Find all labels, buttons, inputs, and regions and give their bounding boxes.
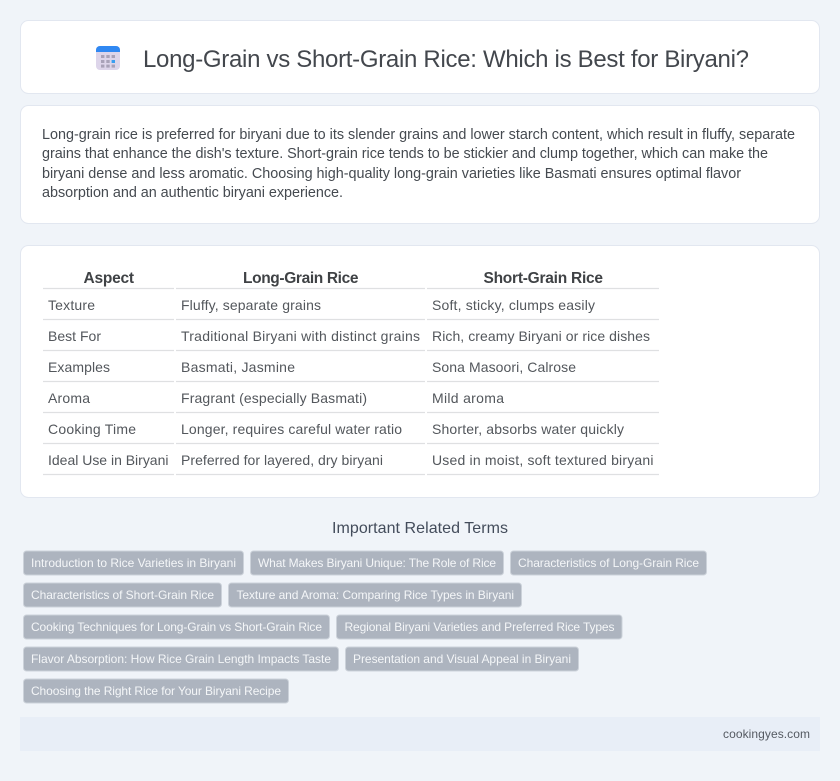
related terms tags xyxy=(24,551,706,703)
footer source text: cookingyes.com xyxy=(723,727,810,741)
row: ideal use: Used in moist, soft textured biryani xyxy=(432,452,654,468)
intro paragraph: absorption and an authentic biryani experience. xyxy=(42,185,343,201)
row: cooking time: Cooking Time xyxy=(48,421,136,437)
row: examples: Basmati, Jasmine xyxy=(181,359,295,375)
table header: Long-Grain Rice xyxy=(243,270,359,287)
row: best for xyxy=(48,328,650,344)
tag: Choosing the Right Rice for Your Biryani Recipe xyxy=(31,684,281,698)
intro paragraph: Long-grain rice is preferred for biryani due to its slender grains and lower starch content, which result in fluffy, separate xyxy=(42,127,795,143)
row: best for: Best For xyxy=(48,328,101,344)
tag: Flavor Absorption: How Rice Grain Length Impacts Taste xyxy=(31,652,331,666)
icon: calendar xyxy=(96,46,120,70)
row: examples: Examples xyxy=(48,359,110,375)
tag xyxy=(24,583,222,607)
row: ideal use: Ideal Use in Biryani xyxy=(48,452,168,468)
table header: Short-Grain Rice xyxy=(484,270,603,287)
header panel xyxy=(20,20,820,94)
tag: Cooking Techniques for Long-Grain vs Short-Grain Rice xyxy=(31,620,322,634)
heading: related terms: Important Related Terms xyxy=(332,520,508,537)
tag: Characteristics of Short-Grain Rice xyxy=(31,588,214,602)
table header xyxy=(84,270,603,287)
intro paragraph: biryani dense and less aromatic. Choosing high-quality long-grain varieties like Basmati ensures optimal flavor xyxy=(42,166,741,182)
row: aroma xyxy=(48,390,504,406)
row: aroma: Fragrant (especially Basmati) xyxy=(181,390,367,406)
row: texture: Texture xyxy=(48,297,95,313)
row: best for: Traditional Biryani with distinct grains xyxy=(181,328,420,344)
tag: Characteristics of Long-Grain Rice xyxy=(518,556,699,570)
tag xyxy=(336,615,622,639)
tag xyxy=(228,583,522,607)
tag xyxy=(24,647,338,671)
intro paragraph: grains that enhance the dish's texture. Short-grain rice tends to be stickier and clump together, which can make the xyxy=(42,146,768,162)
tag xyxy=(24,679,288,703)
row: texture xyxy=(48,297,595,313)
tag: Texture and Aroma: Comparing Rice Types in Biryani xyxy=(236,588,514,602)
intro paragraph xyxy=(42,127,795,201)
tag xyxy=(24,551,244,575)
tag xyxy=(250,551,504,575)
tag: Regional Biryani Varieties and Preferred Rice Types xyxy=(344,620,614,634)
row: cooking time xyxy=(48,421,624,437)
row: examples xyxy=(48,359,576,375)
title: Long-Grain vs Short-Grain Rice: Which is Best for Biryani? xyxy=(143,46,749,73)
tag xyxy=(24,615,330,639)
row: texture: Fluffy, separate grains xyxy=(181,297,321,313)
row: cooking time: Shorter, absorbs water quickly xyxy=(432,421,624,437)
panel: comparison table xyxy=(20,246,820,498)
row: best for: Rich, creamy Biryani or rice dishes xyxy=(432,328,650,344)
row: aroma: Mild aroma xyxy=(432,390,504,406)
tag xyxy=(510,551,706,575)
row: cooking time: Longer, requires careful water ratio xyxy=(181,421,402,437)
panel: introduction xyxy=(20,106,820,224)
table header: Aspect xyxy=(84,270,134,287)
row: ideal use xyxy=(48,452,654,468)
footer xyxy=(20,717,820,751)
tag xyxy=(346,647,578,671)
row: aroma: Aroma xyxy=(48,390,90,406)
row: examples: Sona Masoori, Calrose xyxy=(432,359,576,375)
row: texture: Soft, sticky, clumps easily xyxy=(432,297,595,313)
tag: What Makes Biryani Unique: The Role of Rice xyxy=(258,556,496,570)
tag: Introduction to Rice Varieties in Biryani xyxy=(31,556,236,570)
row: ideal use: Preferred for layered, dry biryani xyxy=(181,452,383,468)
tag: Presentation and Visual Appeal in Biryani xyxy=(353,652,571,666)
